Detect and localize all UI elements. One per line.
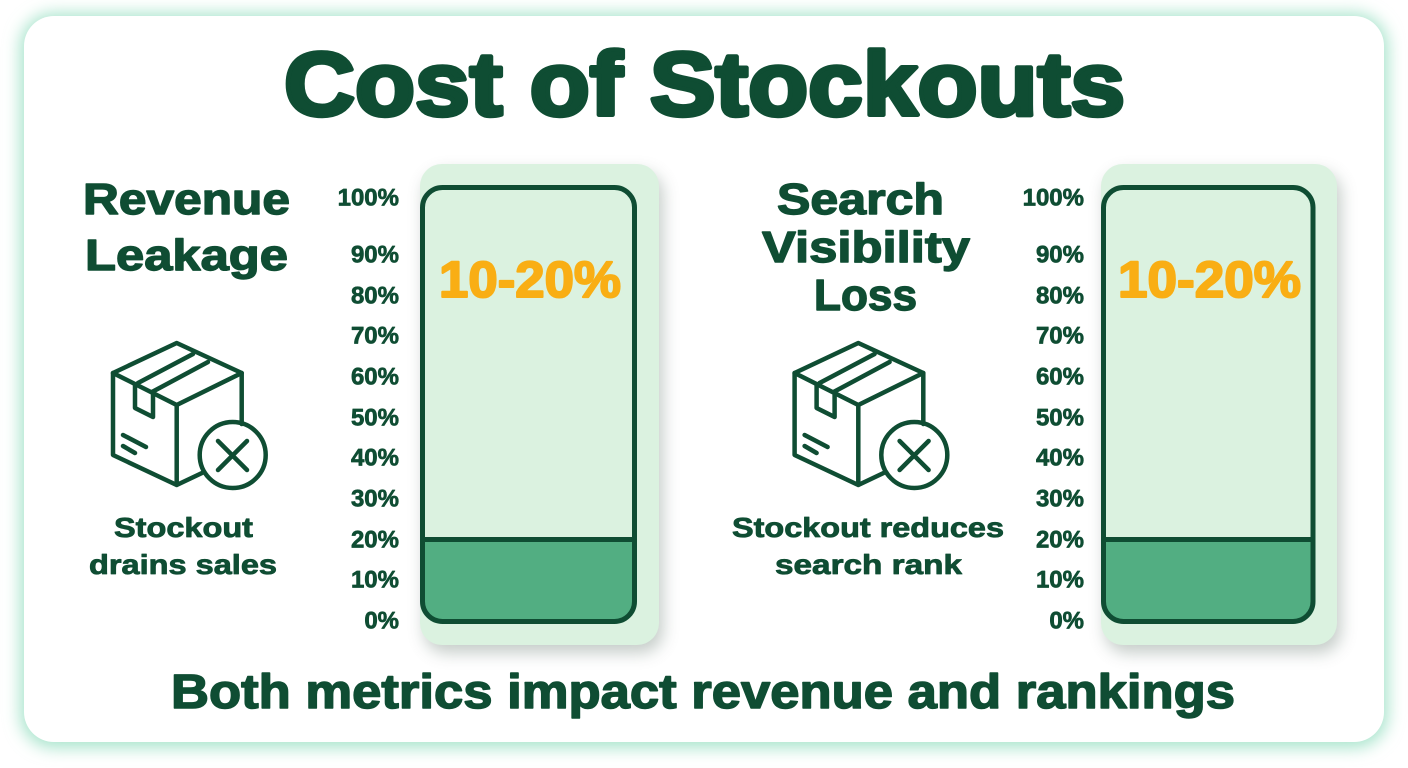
heading: search visibility loss: Loss xyxy=(814,271,917,320)
axis labels: 10% xyxy=(351,566,399,594)
axis labels: 80% xyxy=(351,282,399,310)
bar chart: revenue leakage xyxy=(420,164,663,653)
axis labels: 30% xyxy=(351,486,399,512)
axis labels: 100% xyxy=(338,184,399,212)
axis labels: 70% xyxy=(351,322,399,350)
axis labels: 0% xyxy=(364,608,399,634)
heading: revenue leakage: Revenue xyxy=(83,175,290,224)
caption: stockout drains sales: drains sales xyxy=(89,549,277,580)
footer statement: Both metrics impact revenue and rankings xyxy=(171,666,1235,719)
caption: stockout reduces search rank: Stockout reduces xyxy=(732,512,1004,543)
axis labels: 40% xyxy=(1036,444,1084,472)
title: Cost of Stockouts xyxy=(284,35,1125,135)
caption: stockout reduces search rank xyxy=(732,512,1004,580)
axis labels: 60% xyxy=(1036,364,1084,390)
icon: box with x xyxy=(113,343,266,488)
panel: revenue leakage xyxy=(83,164,663,653)
axis labels: 100% xyxy=(1023,184,1084,212)
heading: search visibility loss xyxy=(762,175,971,320)
axis labels: 70% xyxy=(1036,322,1084,350)
value label: 10-20% xyxy=(1118,251,1301,308)
axis labels: 60% xyxy=(351,364,399,390)
axis labels: 90% xyxy=(1036,242,1084,268)
axis labels: 20% xyxy=(1036,526,1084,554)
heading: search visibility loss: Search xyxy=(777,175,944,224)
axis labels: 30% xyxy=(1036,486,1084,512)
axis labels: 20% xyxy=(351,526,399,554)
axis labels: 90% xyxy=(351,242,399,268)
axis labels: 50% xyxy=(351,404,399,432)
axis labels: 80% xyxy=(1036,282,1084,310)
panel: search visibility loss xyxy=(732,164,1341,653)
icon: box with x xyxy=(795,343,947,488)
caption: stockout drains sales: Stockout xyxy=(114,512,253,543)
bar chart: search visibility loss xyxy=(1101,164,1341,653)
axis labels xyxy=(338,184,399,634)
heading: revenue leakage xyxy=(83,175,290,280)
axis labels: 40% xyxy=(351,444,399,472)
heading: search visibility loss: Visibility xyxy=(762,223,971,272)
heading: revenue leakage: Leakage xyxy=(85,231,288,280)
value label: 10-20% xyxy=(439,251,621,308)
caption: stockout drains sales xyxy=(89,512,277,580)
axis labels xyxy=(1023,184,1084,634)
caption: stockout reduces search rank: search rank xyxy=(775,549,963,580)
axis labels: 10% xyxy=(1036,566,1084,594)
axis labels: 50% xyxy=(1036,404,1084,432)
axis labels: 0% xyxy=(1049,608,1084,634)
